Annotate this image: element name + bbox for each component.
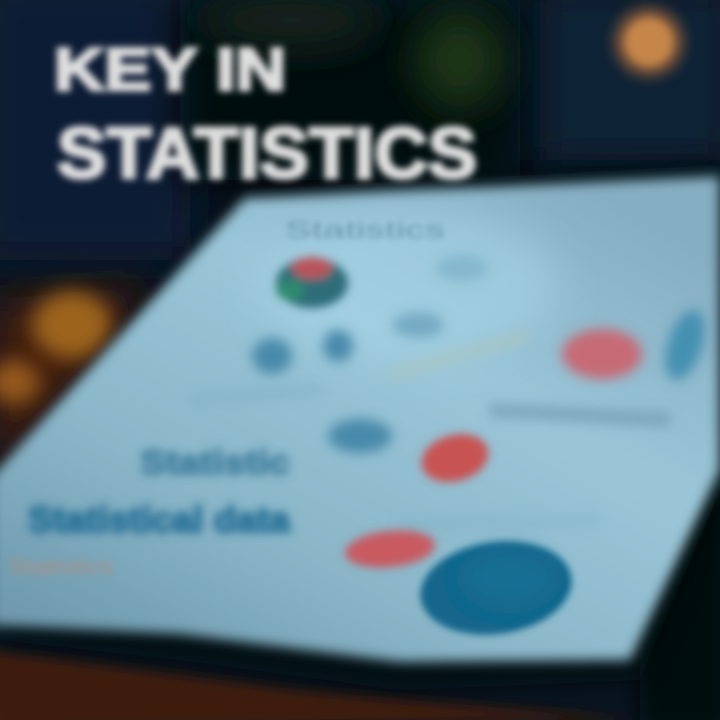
sheet heading: Statistics — [285, 217, 445, 244]
title — [54, 36, 477, 194]
panel: statistics sheet — [0, 165, 720, 690]
blue tab: right — [658, 306, 712, 384]
wooden table: bottom — [0, 650, 640, 720]
blue label: large: Statistical data — [28, 499, 291, 540]
faint line labels — [190, 335, 670, 525]
red badge: lower — [343, 526, 437, 572]
blue label: middle: Statistic — [140, 444, 290, 482]
blue oval badge — [414, 532, 578, 644]
red badge: middle — [416, 427, 494, 489]
title: KEY IN — [54, 36, 286, 103]
icon: pie chart — [276, 257, 348, 308]
small blue marks — [252, 255, 488, 453]
icon: orange lamp — [613, 6, 685, 78]
wooden table: left — [0, 285, 150, 480]
small brown note: Statistics — [8, 554, 113, 579]
title: STATISTICS — [57, 114, 477, 194]
red badge: top right — [562, 329, 642, 379]
